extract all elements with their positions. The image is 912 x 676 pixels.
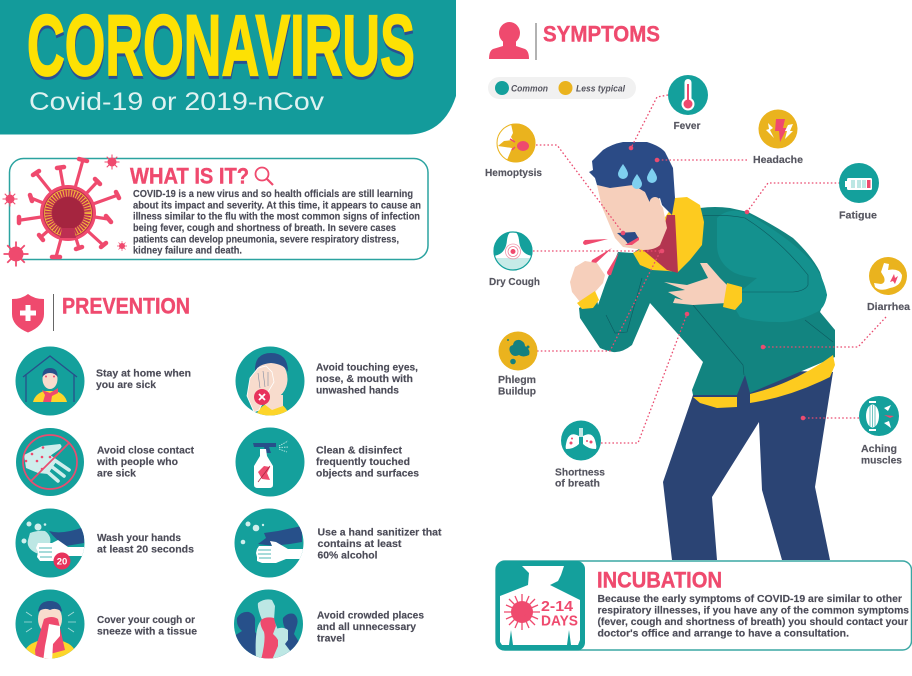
title (27, 0, 416, 97)
text: unwashed hands (316, 386, 399, 396)
text: frequently touched (316, 457, 410, 468)
symptom: diarrhea (867, 257, 910, 313)
icon: person (489, 22, 529, 59)
icon: large virus (19, 159, 119, 257)
text: Avoid close contact (97, 446, 195, 456)
text: Cover your cough or (97, 615, 195, 626)
scarf (643, 215, 678, 273)
text: Clean & disinfect (316, 446, 403, 456)
text: Avoid crowded places (317, 610, 424, 622)
panel: symptoms (485, 22, 910, 560)
text: you are sick (96, 380, 156, 391)
text (318, 528, 442, 562)
sweat drops (618, 164, 657, 189)
panel: incubation (496, 561, 912, 650)
what is it text: patients can develop pneumonia, severe respiratory distress, (133, 234, 399, 245)
incubation badge (496, 561, 585, 650)
text (96, 446, 195, 480)
text: with people who (96, 457, 178, 468)
symptom: diarrhea: Diarrhea (867, 302, 910, 313)
header banner (0, 0, 456, 134)
symptom: dry cough: Dry Cough (489, 277, 540, 288)
symptom: hemoptysis: Hemoptysis (485, 168, 542, 179)
legend (488, 77, 636, 99)
illustration: coughing man (570, 142, 835, 560)
text: objects and surfaces (316, 468, 419, 480)
incubation text (598, 594, 909, 640)
incubation text: doctor's office and arrange to have a consultation. (598, 628, 849, 640)
what is it text: COVID-19 is a new virus and so health officials are still learning (133, 189, 413, 200)
text: travel (317, 634, 345, 644)
what is it text: kidney failure and death. (133, 246, 242, 257)
heading: symptoms: SYMPTOMS (543, 22, 660, 46)
heading: what is it: WHAT IS IT? (130, 164, 249, 188)
symptom: phlegm buildup: Phlegm (498, 375, 536, 386)
icon: virus (504, 594, 540, 630)
incubation days (541, 598, 578, 630)
heading: incubation: INCUBATION (597, 568, 722, 592)
symptom: fever: Fever (674, 121, 700, 132)
panel: what is it (2, 154, 428, 266)
icon: magnifier (256, 168, 273, 185)
text: and all unnecessary (317, 622, 416, 633)
hood (633, 197, 704, 272)
subtitle: Covid-19 or 2019-nCov (29, 88, 325, 116)
incubation days: 2-14 (541, 598, 574, 615)
text: are sick (97, 468, 136, 480)
incubation text: respiratory illnesses, if you have any of the common symptoms (598, 606, 909, 616)
text (97, 533, 194, 556)
what is it text: about its impact and severity. At this time, it appears to cause an (133, 200, 421, 211)
cuff (577, 291, 599, 309)
item: avoid crowds (234, 590, 424, 660)
cough spikes (583, 239, 619, 275)
text: Use a hand sanitizer that (318, 528, 442, 539)
text: Stay at home when (96, 368, 191, 380)
what is it text: being fever, cough and shortness of breath. In severe cases (133, 223, 396, 234)
icon: shield (12, 294, 44, 332)
icon: small viruses (2, 154, 127, 266)
title: CORONAVIRUS (27, 0, 415, 94)
symptom: phlegm buildup (498, 332, 538, 398)
text: 60% alcohol (318, 550, 378, 562)
heading: prevention: PREVENTION (62, 294, 190, 318)
connector lines (533, 95, 886, 443)
symptom: fatigue (839, 163, 879, 222)
jacket (579, 207, 835, 395)
item: wash hands: 20 (57, 556, 67, 568)
text: at least 20 seconds (97, 544, 194, 556)
jacket seams (606, 215, 833, 375)
cuff right (723, 283, 742, 310)
item: hand sanitizer (234, 508, 442, 578)
panel: prevention (12, 294, 442, 671)
text (316, 446, 419, 480)
incubation text: Because the early symptoms of COVID-19 are similar to other (598, 594, 902, 605)
jacket hem (693, 355, 835, 408)
item: clean and disinfect (236, 428, 419, 496)
item: wash hands (16, 508, 194, 578)
symptom: dry cough (489, 232, 540, 288)
text (96, 368, 191, 391)
item: cover cough (16, 590, 197, 658)
face (597, 175, 667, 250)
item: stay at home (16, 346, 191, 416)
item: avoid close contact (16, 428, 195, 496)
sleeve (717, 211, 827, 322)
symptom: aching muscles (859, 396, 902, 466)
symptom: aching muscles: muscles (861, 456, 902, 466)
incubation text: (fever, cough and shortness of breath) you should contact your (598, 617, 908, 628)
symptom: headache: Headache (753, 155, 803, 166)
mouth (617, 232, 639, 244)
symptom: fatigue: Fatigue (839, 210, 877, 222)
symptom: shortness of breath: Shortness (555, 468, 605, 478)
symptom: shortness of breath: of breath (555, 478, 600, 490)
text: contains at least (318, 539, 402, 550)
what is it text (133, 189, 421, 257)
legend: Less typical (576, 84, 625, 94)
what is it text: illness similar to the flu with the most common signs of infection (133, 212, 420, 223)
legend: Common (511, 84, 548, 94)
item: avoid touching (236, 346, 418, 418)
symptom: shortness of breath (555, 420, 605, 490)
symptom: headache (753, 110, 803, 166)
symptom: phlegm buildup: Buildup (498, 386, 536, 398)
text (97, 615, 197, 638)
symptom: fever (668, 75, 708, 132)
trousers (663, 370, 833, 560)
incubation days: DAYS (541, 612, 578, 630)
symptom: hemoptysis (485, 124, 542, 179)
symptom: aching muscles: Aching (861, 444, 897, 455)
fist (570, 261, 605, 302)
text: Avoid touching eyes, (316, 362, 418, 374)
text: Wash your hands (97, 533, 181, 544)
text (316, 362, 418, 396)
title: CORONAVIRUS (28, 1, 416, 97)
hair (589, 142, 675, 215)
text: sneeze with a tissue (97, 626, 197, 638)
hand (664, 263, 727, 305)
text: nose, & mouth with (316, 374, 413, 385)
text (317, 610, 424, 644)
